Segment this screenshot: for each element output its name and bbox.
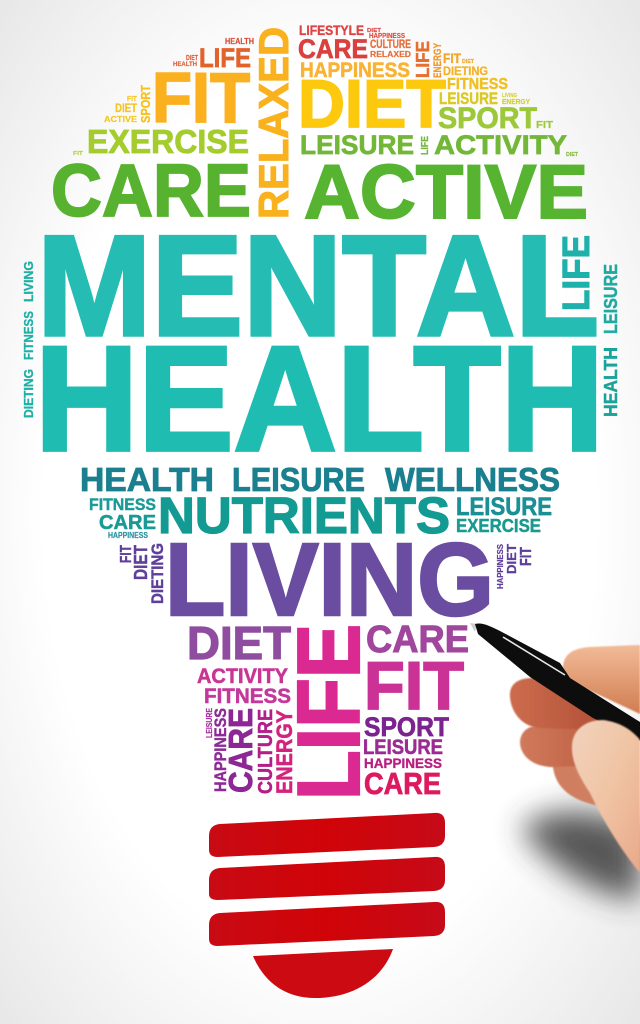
word: LEISURE tiny vertical: LEISURE	[204, 708, 214, 738]
word: HAPPINESS: HAPPINESS	[300, 59, 410, 82]
pen	[470, 623, 640, 741]
word: SPORT vertical: SPORT	[138, 85, 153, 123]
word: DIETING vertical: DIETING	[21, 369, 36, 418]
word: LIVING vertical: LIVING	[21, 261, 36, 302]
bulb cap	[253, 949, 393, 998]
word: HEALTH row: HEALTH	[80, 462, 214, 499]
word: MENTAL: MENTAL	[37, 207, 599, 366]
word: DIET big: DIET	[298, 67, 446, 142]
word: CULTURE: CULTURE	[370, 38, 411, 51]
word: LEISURE vertical: LEISURE	[600, 264, 621, 334]
word: FIT: FIT	[152, 58, 250, 137]
word: DIETING vertical: DIETING	[148, 543, 167, 604]
word: LEISURE row: LEISURE	[232, 462, 365, 499]
word: HAPPINESS tiny: HAPPINESS	[369, 31, 405, 40]
word: EXERCISE: EXERCISE	[456, 515, 541, 536]
word: LIVING: LIVING	[165, 522, 494, 637]
word cloud: bulb neck	[187, 617, 469, 801]
word cloud: bulb top left	[51, 27, 297, 232]
bulb screw thread 1	[209, 813, 445, 857]
ring finger	[520, 726, 600, 767]
word: NUTRIENTS: NUTRIENTS	[158, 487, 450, 544]
word: LIFE teal vertical: LIFE	[556, 235, 598, 311]
word: DIET mauve: DIET	[187, 617, 291, 669]
word: HEALTH: HEALTH	[225, 36, 254, 46]
pen tip	[470, 623, 477, 632]
word: FIT orange: FIT	[443, 51, 461, 67]
word: CARE mauve: CARE	[366, 619, 469, 661]
word: HAPPINESS vertical: HAPPINESS	[495, 544, 505, 589]
word: FIT magenta: FIT	[364, 648, 464, 724]
word cloud: nutrients band	[80, 462, 560, 544]
word: LIFE big vertical: LIFE	[279, 624, 378, 800]
pen highlight	[503, 637, 565, 675]
word: FIT tiny: FIT	[73, 151, 84, 157]
word cloud: mental health band	[21, 207, 621, 482]
word: LIFESTYLE: LIFESTYLE	[299, 23, 364, 39]
word: DIET tiny green: DIET	[566, 152, 578, 158]
word: ENERGY vertical: ENERGY	[272, 710, 297, 794]
word: FIT small: FIT	[127, 94, 137, 103]
pen body	[475, 623, 640, 741]
word: LEISURE: LEISURE	[363, 736, 443, 759]
word: FIT green: FIT	[536, 120, 554, 131]
word: RELAXED: RELAXED	[370, 49, 411, 59]
index finger	[563, 645, 640, 714]
word: DIET: DIET	[186, 53, 198, 62]
word: CULTURE vertical: CULTURE	[255, 709, 277, 794]
middle finger	[510, 678, 610, 730]
word: FITNESS vertical: FITNESS	[21, 311, 36, 360]
word: HAPPINESS: HAPPINESS	[364, 756, 442, 772]
word: LIFE vertical: LIFE	[412, 41, 433, 78]
word: EXERCISE: EXERCISE	[87, 124, 249, 161]
word: CARE red: CARE	[298, 34, 368, 64]
word: WELLNESS row: WELLNESS	[385, 462, 560, 499]
word: LEISURE: LEISURE	[439, 89, 498, 108]
icon: light bulb base	[209, 813, 445, 998]
word: FITNESS: FITNESS	[89, 495, 156, 514]
word cloud: living band	[118, 522, 535, 637]
word: SPORT: SPORT	[364, 712, 450, 742]
thumb and palm	[572, 720, 640, 873]
word: DIET tiny: DIET	[367, 28, 381, 34]
word: DIET small: DIET	[115, 102, 137, 115]
word: DIET vertical right: DIET	[504, 544, 519, 574]
word: FIT vertical right: FIT	[518, 547, 535, 566]
bulb screw thread 2	[209, 857, 445, 900]
word cloud: bulb top right	[298, 23, 588, 235]
word: RELAXED vertical: RELAXED	[250, 27, 297, 219]
word: LEISURE right: LEISURE	[456, 493, 552, 521]
word: LEISURE green: LEISURE	[300, 130, 414, 160]
word: ACTIVE: ACTIVE	[104, 114, 137, 124]
word: CARE: CARE	[99, 511, 156, 534]
word: DIET vertical: DIET	[130, 544, 151, 580]
word: LIFE: LIFE	[199, 43, 251, 73]
little finger	[553, 757, 610, 806]
word: ACTIVE big: ACTIVE	[304, 150, 588, 235]
word: HAPPINESS vertical: HAPPINESS	[211, 708, 230, 792]
bulb screw thread 3	[209, 902, 445, 946]
word: LIVING tiny: LIVING	[502, 93, 517, 99]
word: LIFE small vertical: LIFE	[420, 136, 431, 155]
word: HEALTH big: HEALTH	[35, 315, 604, 482]
word: ENERGY vertical: ENERGY	[432, 43, 444, 78]
word: SPORT: SPORT	[438, 102, 537, 135]
word: HEALTH vertical: HEALTH	[600, 347, 621, 417]
word: HAPPINESS: HAPPINESS	[108, 530, 148, 540]
word: DIET orange: DIET	[462, 59, 474, 65]
word: FITNESS: FITNESS	[204, 685, 291, 708]
word: CARE: CARE	[51, 149, 251, 232]
word: FITNESS: FITNESS	[447, 76, 508, 93]
hand shadow	[520, 811, 640, 900]
word: CARE crimson: CARE	[364, 766, 441, 801]
word: FIT vertical: FIT	[118, 545, 135, 563]
word: CARE vertical: CARE	[223, 708, 260, 793]
word: ACTIVITY: ACTIVITY	[434, 130, 567, 160]
word: ACTIVITY: ACTIVITY	[197, 665, 288, 688]
icon: hand holding pen	[470, 623, 640, 873]
word: DIETING: DIETING	[443, 65, 488, 78]
word: ENERGY tiny: ENERGY	[502, 97, 530, 106]
word: HEALTH small: HEALTH	[173, 61, 197, 68]
